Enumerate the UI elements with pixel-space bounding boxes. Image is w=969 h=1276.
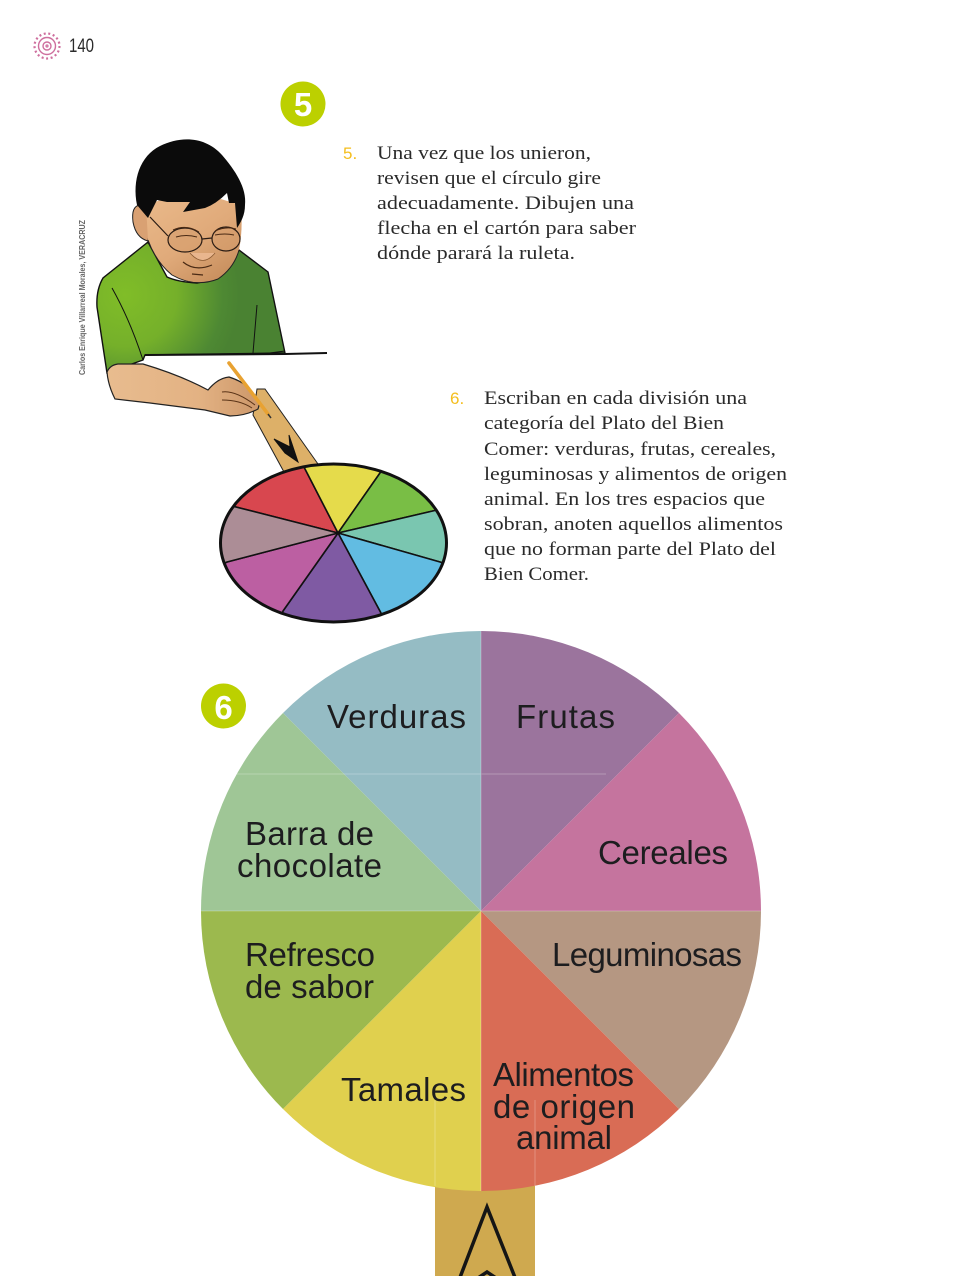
label: Barra de chocolate: chocolate bbox=[237, 847, 382, 884]
sector: Tamales bbox=[283, 911, 481, 1191]
text: instruction 5: 5. bbox=[343, 144, 357, 163]
text: instruction 5: Una vez que los unieron, bbox=[377, 144, 591, 164]
sector: Alimentos de origen animal bbox=[481, 911, 679, 1191]
text: instruction 6: Bien Comer. bbox=[484, 565, 589, 585]
text: instruction 6: Comer: verduras, frutas, cereales, bbox=[484, 440, 776, 460]
label: Alimentos de origen animal: animal bbox=[516, 1119, 612, 1156]
sector: Verduras bbox=[283, 631, 481, 911]
roulette wheel bbox=[201, 631, 761, 1191]
badge: step 6 bbox=[201, 684, 246, 728]
text: instruction 6: animal. En los tres espacios que bbox=[484, 490, 765, 510]
sector: Refresco de sabor bbox=[201, 911, 481, 1109]
text: instruction 5: flecha en el cartón para saber bbox=[377, 219, 636, 239]
text: instruction 6: leguminosas y alimentos de origen bbox=[484, 465, 787, 485]
fingers bbox=[222, 392, 255, 408]
label: Alimentos de origen animal: Alimentos bbox=[493, 1056, 634, 1093]
roulette: pointer arrow bbox=[274, 435, 298, 462]
text: instruction 5 bbox=[343, 144, 636, 264]
sector: Leguminosas bbox=[481, 911, 761, 1109]
sector: Cereales bbox=[481, 713, 761, 911]
boy: glasses bbox=[150, 217, 240, 252]
text: instruction 6: categoría del Plato del Bien bbox=[484, 414, 724, 434]
pencil bbox=[229, 363, 268, 414]
cardboard tab with arrow bbox=[435, 1180, 535, 1276]
table edge bbox=[145, 353, 327, 355]
credit: Carlos Enrique Villarreal Morales, VERACRUZ bbox=[77, 220, 87, 375]
illustration: boy drawing an arrow on the roulette bbox=[97, 139, 470, 650]
text: instruction 6: sobran, anoten aquellos alimentos bbox=[484, 515, 783, 535]
boy: face bbox=[146, 190, 242, 283]
badge: step 5 bbox=[280, 82, 326, 126]
roulette: small colored wheel bbox=[219, 462, 448, 624]
label: Refresco de sabor: Refresco bbox=[245, 936, 375, 973]
label: Frutas: Frutas bbox=[516, 698, 615, 735]
text: instruction 5: dónde parará la ruleta. bbox=[377, 244, 575, 264]
label: Cereales: Cereales bbox=[598, 834, 728, 871]
label: Alimentos de origen animal bbox=[493, 1056, 635, 1156]
label: Leguminosas: Leguminosas bbox=[552, 936, 742, 973]
text: instruction 5: revisen que el círculo gire bbox=[377, 169, 601, 189]
text: instruction 6 bbox=[450, 389, 787, 585]
sector: Frutas bbox=[481, 631, 679, 911]
text: instruction 6: que no forman parte del Plato del bbox=[484, 540, 776, 560]
boy: shirt seams bbox=[112, 288, 285, 360]
boy: shirt bbox=[97, 242, 285, 373]
text: instruction 6: Escriban en cada división una bbox=[484, 389, 747, 409]
label: Refresco de sabor bbox=[245, 936, 375, 1005]
boy: ear bbox=[133, 205, 152, 241]
badge: step 6: 6 bbox=[214, 689, 233, 726]
roulette: cardboard pointer bbox=[253, 389, 318, 472]
label: Barra de chocolate: Barra de bbox=[245, 815, 374, 852]
boy: arm and hand bbox=[107, 364, 260, 416]
badge: step 5: 5 bbox=[294, 86, 312, 123]
sector: Barra de chocolate bbox=[201, 713, 481, 911]
label: Verduras: Verduras bbox=[327, 698, 466, 735]
boy: hair bbox=[136, 139, 245, 228]
boy: eyes, nose and mouth bbox=[173, 227, 236, 237]
label: Refresco de sabor: de sabor bbox=[245, 968, 374, 1005]
page number: 140 bbox=[69, 36, 94, 57]
icon: page ornament bbox=[34, 34, 60, 58]
label: Barra de chocolate bbox=[237, 815, 382, 884]
label: Alimentos de origen animal: de origen bbox=[493, 1088, 635, 1125]
text: instruction 5: adecuadamente. Dibujen una bbox=[377, 194, 634, 214]
label: Tamales: Tamales bbox=[341, 1071, 466, 1108]
text: instruction 6: 6. bbox=[450, 389, 464, 408]
